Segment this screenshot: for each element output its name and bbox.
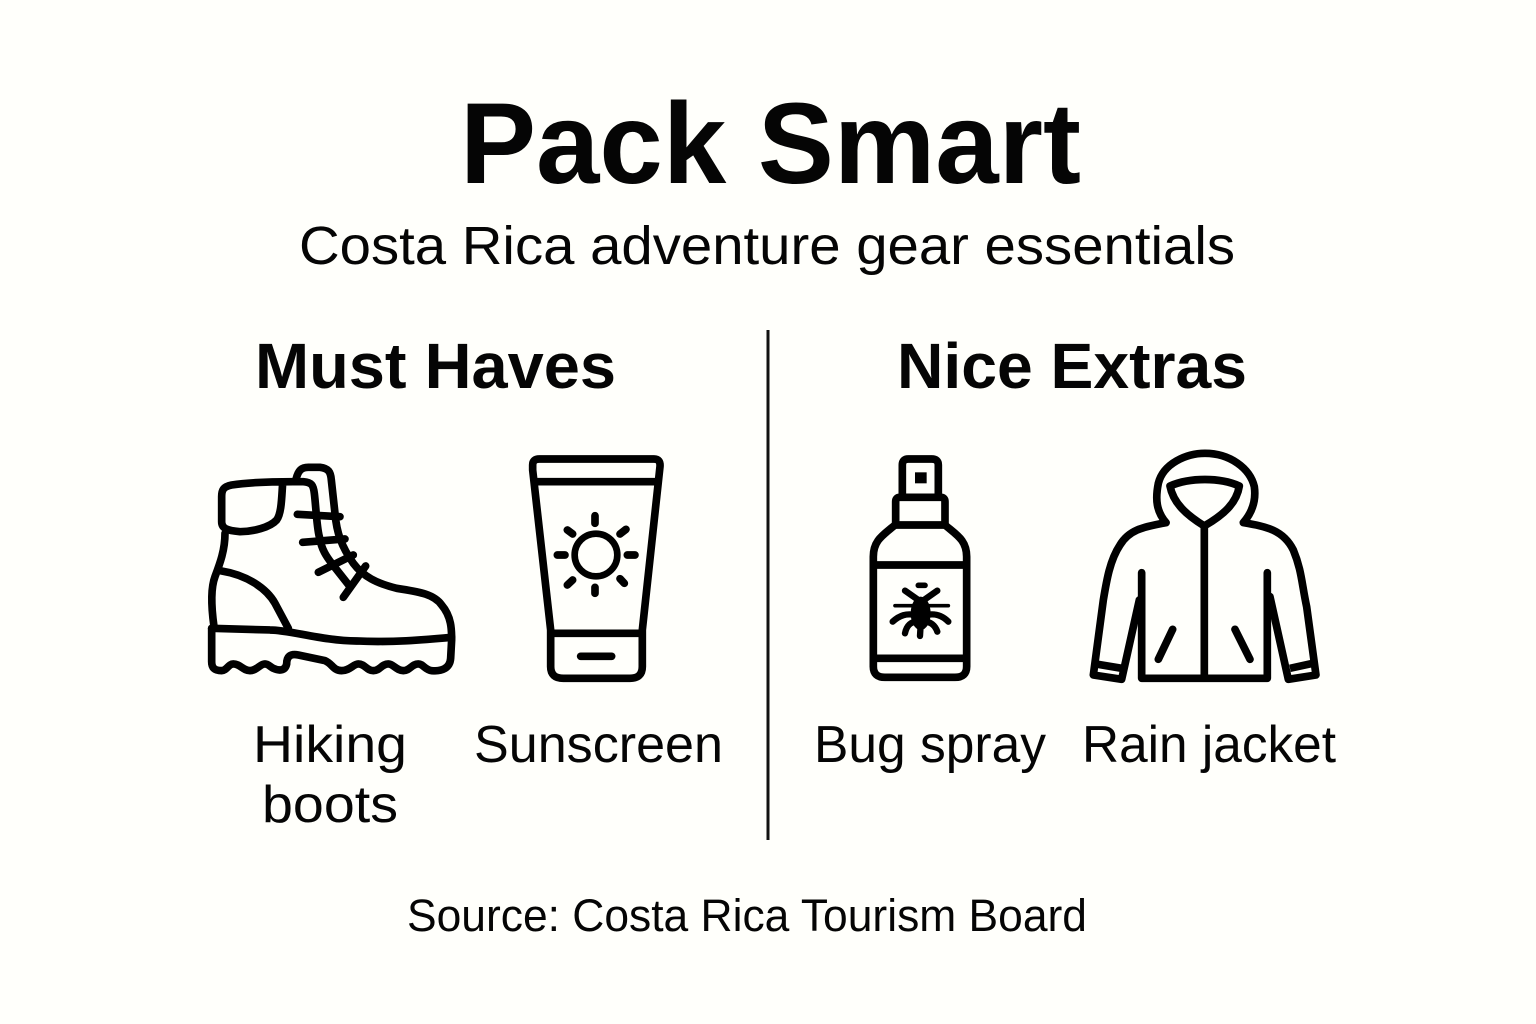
label: hiking boots: Hiking [253,716,407,774]
heading: nice extras: Nice Extras [897,330,1247,402]
icon: bug [893,585,948,636]
icon: rain jacket [1093,453,1316,679]
source note: Source: Costa Rica Tourism Board [407,890,1087,941]
icon: bug spray bottle [873,459,967,677]
label: bug spray: Bug spray [814,716,1046,774]
title: Pack Smart [460,80,1081,208]
label: sunscreen: Sunscreen [474,716,723,774]
icon: hiking boot [212,467,452,671]
icon: sunscreen tube [533,459,660,678]
heading: must haves: Must Haves [255,330,616,402]
label: rain jacket: Rain jacket [1082,716,1337,774]
label: hiking boots [253,716,407,834]
subtitle: Costa Rica adventure gear essentials [299,216,1235,276]
label: hiking boots: boots [262,776,398,834]
